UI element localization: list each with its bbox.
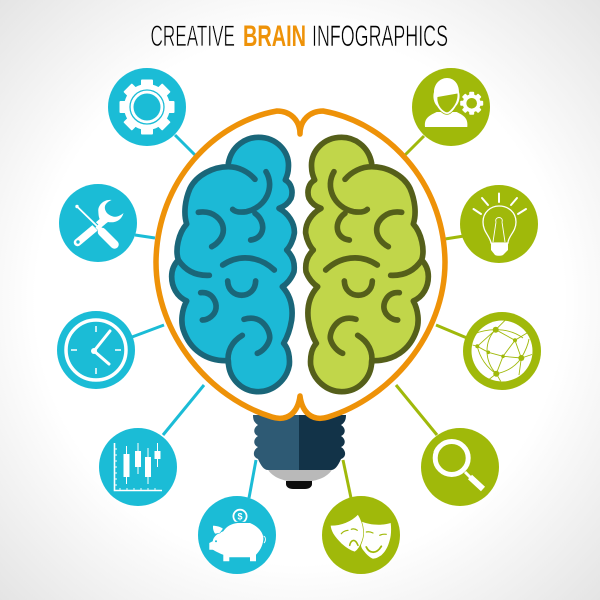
wrench <box>76 200 124 244</box>
coin <box>232 509 248 524</box>
screwdriver <box>75 205 114 244</box>
icon: theatre masks <box>322 496 400 574</box>
lightbulb outline <box>156 111 445 418</box>
light bulb base <box>253 415 346 489</box>
worker head <box>433 78 460 114</box>
worker body <box>425 112 467 127</box>
mask happy <box>360 521 391 559</box>
connector lines <box>132 135 467 498</box>
title: BRAIN <box>243 20 306 53</box>
bulb screw left <box>253 415 300 470</box>
icon: piggy bank <box>198 496 276 574</box>
icon: magnifier <box>421 428 499 506</box>
pig body <box>209 523 263 561</box>
icon: clock <box>57 311 135 389</box>
bulb screw right <box>299 415 346 470</box>
bulb cap grey <box>267 468 333 482</box>
small gear <box>460 92 483 115</box>
left brain hemisphere <box>172 137 294 392</box>
bulb tip <box>286 481 312 489</box>
icon: candlestick chart <box>99 428 177 506</box>
icon: globe network <box>463 312 541 390</box>
right brain hemisphere <box>306 137 428 392</box>
title: CREATIVE <box>150 20 235 53</box>
icon: worker with gear <box>412 68 490 146</box>
mask sad <box>330 514 364 552</box>
icon: piggy bank: $ <box>237 512 243 522</box>
title: INFOGRAPHICS <box>312 20 448 53</box>
title <box>150 20 448 53</box>
worker face <box>437 94 458 112</box>
icon: wrench and screwdriver <box>59 184 137 262</box>
icon: idea bulb <box>460 185 538 263</box>
icon: gear <box>108 68 186 146</box>
